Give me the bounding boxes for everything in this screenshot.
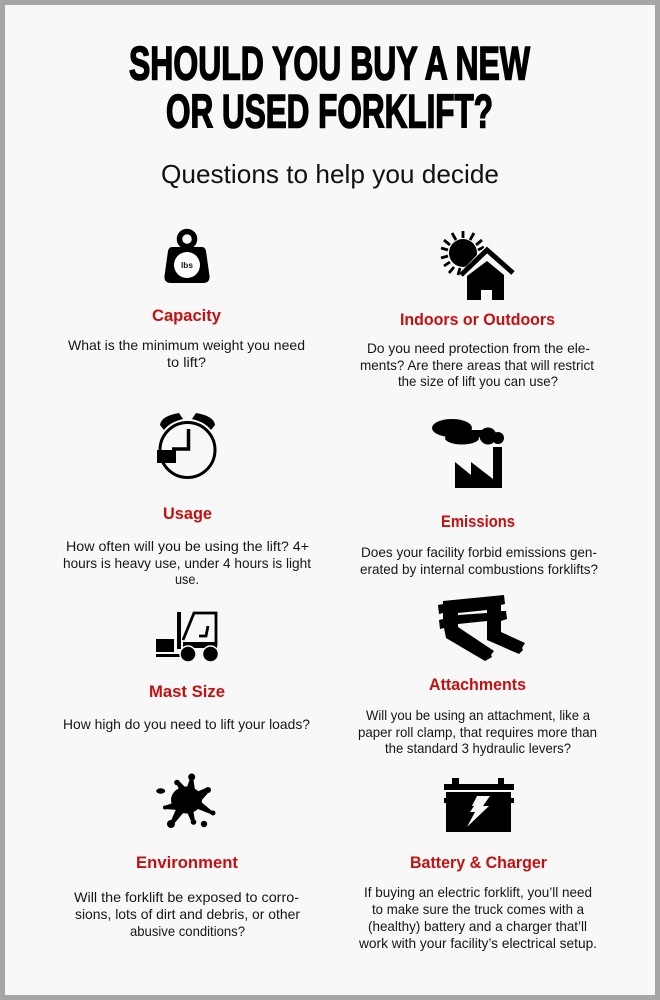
text: usage <box>63 538 311 587</box>
text: emissions: erated by internal combustions forklifts? <box>360 561 598 577</box>
icon: factory with smoke <box>432 419 504 488</box>
text: attachments: the standard 3 hydraulic levers? <box>385 740 571 756</box>
title <box>129 38 530 138</box>
heading: emissions: Emissions <box>441 512 515 531</box>
text: environment: sions, lots of dirt and debris, or other <box>75 906 300 922</box>
panel: usage <box>63 413 311 587</box>
panel: emissions <box>360 419 598 577</box>
text: usage: hours is heavy use, under 4 hours is light <box>63 555 311 571</box>
text: environment <box>74 889 300 939</box>
text: indoors or outdoors: the size of lift you can use? <box>398 373 558 389</box>
heading: environment: Environment <box>136 853 238 872</box>
text: emissions: Does your facility forbid emissions gen- <box>361 544 597 560</box>
text: capacity: What is the minimum weight you need <box>68 337 305 353</box>
panel: environment <box>74 774 300 939</box>
text: battery and charger: If buying an electric forklift, you’ll need <box>364 884 592 900</box>
text: attachments: Will you be using an attachment, like a <box>366 707 590 723</box>
heading: attachments: Attachments <box>429 675 526 694</box>
icon: forklift <box>156 612 218 662</box>
heading: usage: Usage <box>163 504 212 523</box>
text: emissions <box>360 544 598 577</box>
text: environment: abusive conditions? <box>130 923 245 939</box>
text: usage: How often will you be using the lift? 4+ <box>66 538 309 554</box>
text: indoors or outdoors <box>360 340 594 389</box>
icon: weight <box>164 232 210 283</box>
icon: battery <box>444 778 514 832</box>
icon: splat <box>156 774 216 828</box>
panel: indoors or outdoors <box>360 231 594 389</box>
subtitle: Questions to help you decide <box>161 159 499 189</box>
text: capacity: to lift? <box>167 354 206 370</box>
text: attachments: paper roll clamp, that requires more than <box>358 724 597 740</box>
text: battery and charger: to make sure the truck comes with a <box>372 901 584 917</box>
text: battery and charger: (healthy) battery and a charger that’ll <box>368 918 587 934</box>
icon: sun and house <box>441 231 513 300</box>
heading: indoors or outdoors: Indoors or Outdoors <box>400 310 555 329</box>
heading: mast size: Mast Size <box>149 682 225 701</box>
icon: forklift attachment <box>438 595 525 661</box>
text: attachments <box>358 707 597 756</box>
panel: mast size <box>63 612 310 732</box>
text: usage: use. <box>175 571 199 587</box>
text: battery and charger <box>358 884 597 951</box>
panel: attachments <box>358 595 597 756</box>
heading: battery and charger: Battery & Charger <box>410 853 547 872</box>
panel: battery and charger <box>358 778 597 951</box>
panel: capacity <box>68 232 305 370</box>
text: indoors or outdoors: Do you need protection from the ele- <box>367 340 590 356</box>
icon: alarm clock <box>157 413 215 478</box>
text: indoors or outdoors: ments? Are there areas that will restrict <box>360 357 594 373</box>
text: mast size: How high do you need to lift your loads? <box>63 716 310 732</box>
text: environment: Will the forklift be exposed to corro- <box>74 889 299 905</box>
heading: capacity: Capacity <box>152 306 222 325</box>
title: OR USED FORKLIFT? <box>166 86 493 138</box>
icon: weight: lbs <box>181 260 193 270</box>
text: battery and charger: work with your facility’s electrical setup. <box>358 935 597 951</box>
text: capacity <box>68 337 305 370</box>
